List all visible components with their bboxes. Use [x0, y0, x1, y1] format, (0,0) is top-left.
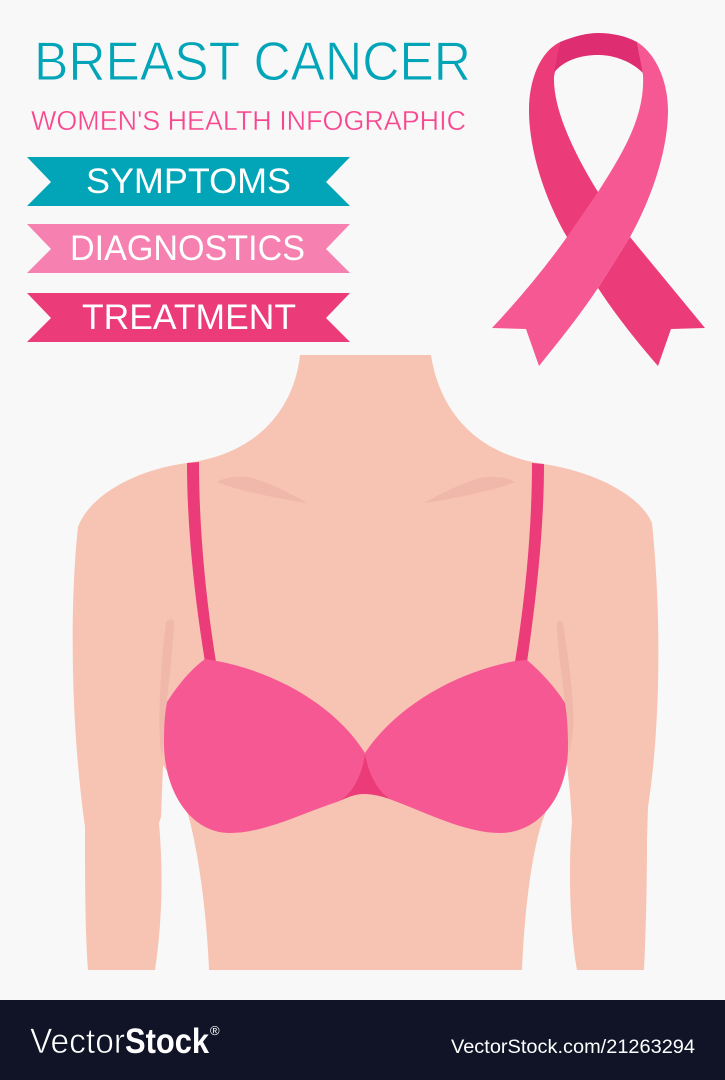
left armpit shadow	[159, 619, 174, 757]
banner: treatment: TREATMENT	[82, 298, 296, 337]
left bra strap	[187, 462, 216, 662]
banner: diagnostics: DIAGNOSTICS	[70, 229, 305, 268]
footer bar	[0, 1000, 725, 1080]
right bra strap	[515, 463, 544, 662]
banner: symptoms	[27, 157, 350, 206]
footer logo: Vector	[30, 1022, 125, 1061]
icon: awareness ribbon	[492, 33, 705, 366]
footer logo	[30, 1022, 220, 1061]
footer logo: ®	[210, 1023, 220, 1038]
left bra cup	[164, 659, 365, 833]
banner: treatment	[27, 293, 350, 342]
subtitle: WOMEN'S HEALTH INFOGRAPHIC	[31, 105, 466, 136]
right bra cup	[365, 660, 568, 833]
figure: female torso	[73, 355, 658, 970]
right armpit shadow	[557, 621, 573, 753]
bra centre gore	[337, 753, 392, 802]
banner: diagnostics	[27, 224, 350, 273]
footer image id: VectorStock.com/21263294	[451, 1037, 695, 1058]
left collarbone shadow	[217, 477, 307, 503]
footer logo: Stock	[125, 1022, 209, 1061]
banner: symptoms: SYMPTOMS	[86, 162, 291, 201]
title: BREAST CANCER	[34, 30, 471, 92]
right collarbone shadow	[424, 477, 515, 503]
